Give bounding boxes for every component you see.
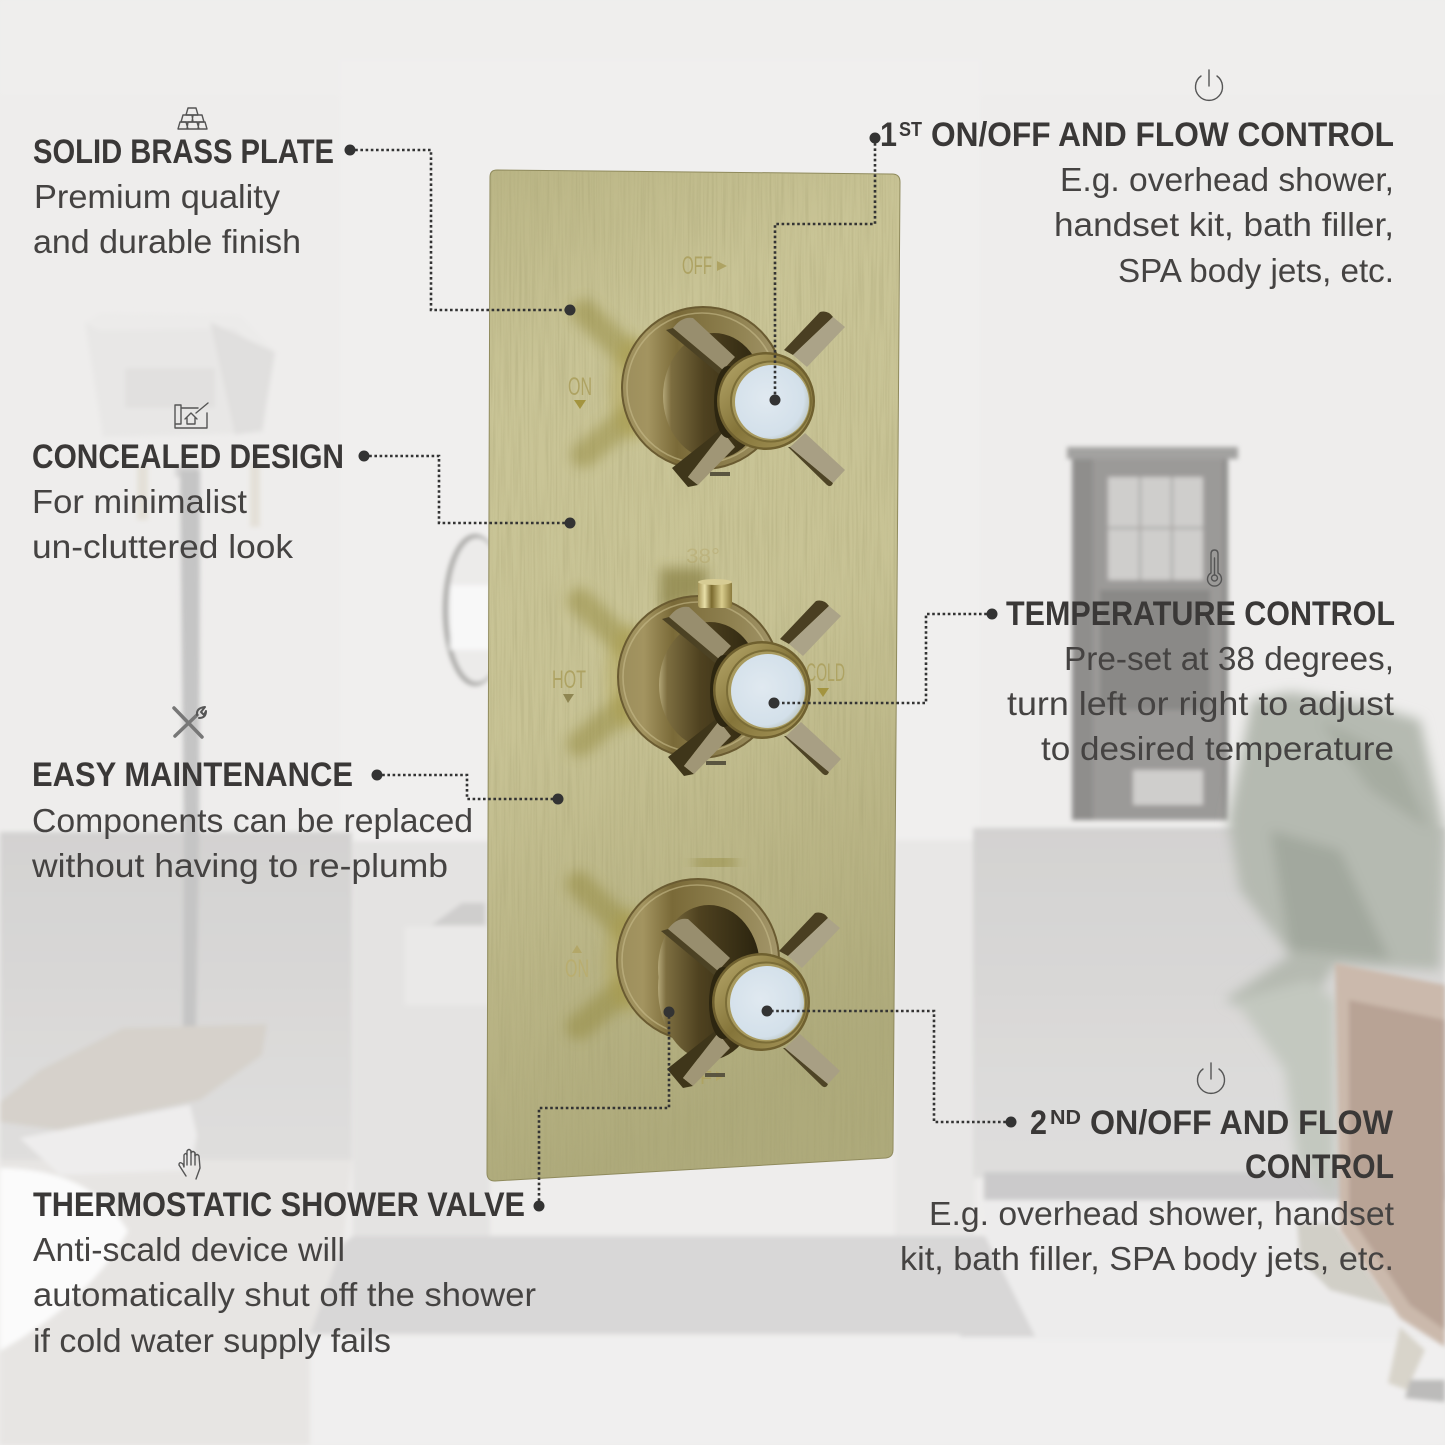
heading: TEMPERATURE CONTROL — [1006, 595, 1395, 633]
temperature stop pin — [698, 579, 732, 608]
heading: EASY MAINTENANCE — [32, 756, 353, 794]
description: un-cluttered look — [32, 528, 294, 565]
panel: concealed design — [32, 403, 344, 565]
leader line: first on/off control — [770, 132, 880, 406]
description: and durable finish — [33, 223, 301, 260]
icon: gold bars — [178, 108, 207, 129]
plate marking: COLD — [806, 659, 845, 697]
icon: house blueprint — [175, 403, 208, 428]
panel: temperature control — [1006, 550, 1395, 767]
description: Anti-scald device will — [33, 1231, 345, 1268]
leader line: concealed design — [358, 450, 576, 528]
plate marking: lower ON: ON — [565, 955, 589, 983]
leader line: easy maintenance — [372, 770, 564, 804]
plate marking: lower OFF: F — [700, 1068, 712, 1088]
heading: 2 — [1030, 1104, 1047, 1142]
plate marking: lower ON — [565, 945, 589, 983]
description: if cold water supply fails — [33, 1322, 391, 1359]
description: automatically shut off the shower — [33, 1276, 536, 1313]
leader line: thermostatic shower valve — [534, 1006, 674, 1212]
icon: power — [1196, 70, 1222, 100]
panel: second on/off and flow control — [900, 1063, 1394, 1277]
description: E.g. overhead shower, handset — [929, 1195, 1394, 1232]
icon: power — [1198, 1063, 1224, 1093]
plate marking: ON: ON — [568, 373, 592, 401]
panel: easy maintenance — [31, 707, 473, 884]
bottom control handle — [579, 860, 840, 1088]
description: to desired temperature — [1041, 730, 1394, 767]
plate marking: HOT — [552, 666, 586, 703]
icon: hand — [179, 1150, 200, 1179]
description — [32, 483, 294, 565]
heading: CONCEALED DESIGN — [32, 438, 344, 476]
description: Premium quality — [34, 178, 281, 215]
heading: ON/OFF AND FLOW CONTROL — [931, 116, 1394, 154]
icon: crossed tools — [174, 707, 206, 737]
leader line: second on/off control — [762, 1006, 1016, 1128]
description: Components can be replaced — [32, 802, 473, 839]
description: kit, bath filler, SPA body jets, etc. — [900, 1240, 1394, 1277]
description — [33, 178, 301, 260]
heading: ST — [899, 119, 922, 141]
description — [1054, 161, 1394, 289]
heading: THERMOSTATIC SHOWER VALVE — [33, 1186, 525, 1224]
brass wall plate — [487, 170, 900, 1181]
heading: ND — [1050, 1107, 1081, 1129]
plate marking: OFF: OFF — [682, 252, 712, 280]
description: For minimalist — [32, 483, 247, 520]
top control handle — [584, 307, 845, 487]
heading: ON/OFF AND FLOW — [1090, 1104, 1394, 1142]
heading: 1 — [880, 116, 897, 154]
plate marking: lower OFF — [700, 1068, 725, 1088]
description: Pre-set at 38 degrees, — [1064, 640, 1394, 677]
icon: thermometer — [1208, 550, 1222, 586]
panel: solid brass plate — [33, 108, 334, 260]
heading — [1030, 1104, 1394, 1186]
description — [33, 1231, 536, 1359]
description: handset kit, bath filler, — [1054, 206, 1394, 243]
plate marking: COLD: COLD — [806, 659, 845, 687]
description: E.g. overhead shower, — [1060, 161, 1394, 198]
description — [1007, 640, 1394, 767]
description: SPA body jets, etc. — [1118, 252, 1394, 289]
description — [31, 802, 473, 884]
leader line: solid brass plate — [344, 144, 576, 316]
plate marking: HOT: HOT — [552, 666, 586, 694]
wooden cabinet — [443, 534, 1445, 1402]
description: turn left or right to adjust — [1007, 685, 1394, 722]
middle temperature handle — [580, 568, 841, 776]
plate marking: ON — [568, 373, 592, 409]
leader line: temperature control — [768, 608, 998, 708]
plate marking: 38 degrees: 38° — [686, 545, 720, 568]
heading: SOLID BRASS PLATE — [33, 133, 334, 171]
houseplant — [1225, 692, 1445, 1200]
description: without having to re-plumb — [31, 847, 448, 884]
heading: CONTROL — [1245, 1148, 1394, 1186]
panel: thermostatic shower valve — [33, 1150, 536, 1359]
description — [900, 1195, 1394, 1277]
panel: first on/off and flow control — [880, 70, 1394, 289]
